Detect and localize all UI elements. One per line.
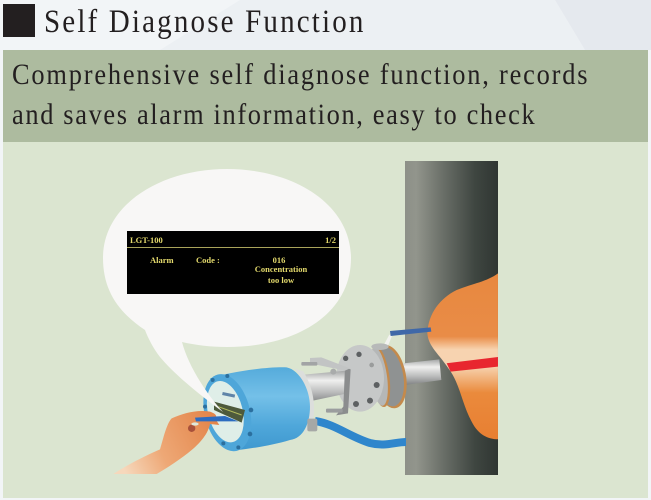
blue cable [315, 421, 406, 445]
hand with stylus [113, 411, 238, 474]
description line 1: Comprehensive self diagnose function, records [12, 59, 588, 91]
panel: illustration background [3, 142, 648, 498]
screen text: LGT-100 [130, 235, 163, 245]
stylus [195, 416, 238, 421]
steel collar [295, 369, 314, 437]
flange [336, 345, 384, 412]
orange flame [427, 273, 498, 439]
white face [201, 377, 250, 446]
analyzer unit [196, 367, 317, 456]
valve handle [383, 335, 392, 347]
cable gland [307, 419, 317, 431]
screen text: 016 [273, 255, 285, 265]
probe tube [403, 359, 441, 385]
blue front ring [196, 369, 259, 456]
speech bubble [103, 169, 351, 412]
screen text [130, 235, 336, 285]
valve and flange assembly [300, 327, 441, 415]
screen text: Code : [196, 255, 220, 265]
panel: description band [3, 50, 648, 142]
screen text: 1/2 [325, 235, 336, 245]
face logo [222, 392, 235, 398]
bracket plate [336, 367, 351, 415]
alarm display screen [127, 231, 339, 294]
connector tube [300, 371, 347, 403]
description line 2: and saves alarm information, easy to check [12, 99, 536, 131]
bracket bolts [326, 409, 343, 413]
analyzer display [214, 402, 245, 423]
screen text: Alarm [150, 255, 174, 265]
bolts [203, 374, 253, 449]
heading: Self Diagnose Function [3, 2, 364, 39]
pipe [405, 161, 498, 475]
screen text: too low [268, 275, 295, 285]
screen text: Concentration [255, 264, 307, 274]
blue cylinder [210, 367, 310, 451]
valve body [369, 342, 411, 411]
heading text: Self Diagnose Function [44, 2, 364, 39]
icon: black square [3, 4, 35, 37]
red laser beam [447, 357, 498, 372]
